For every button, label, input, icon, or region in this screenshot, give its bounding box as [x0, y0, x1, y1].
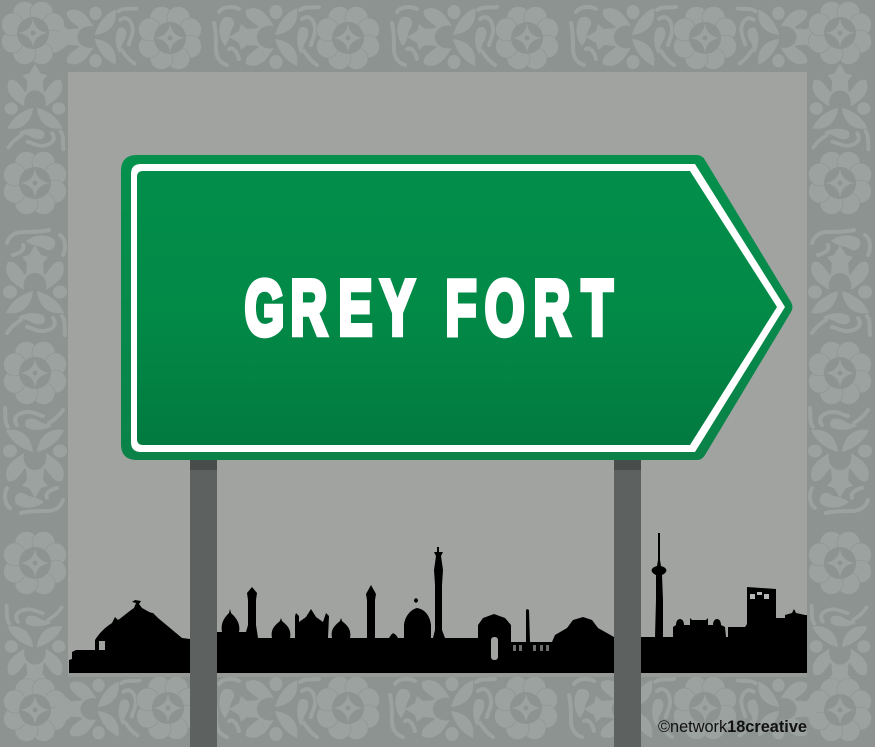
sign outer edge [121, 155, 792, 460]
copyright credit: ©network18creative [658, 718, 807, 736]
right border [808, 64, 872, 741]
sign white inset border [131, 164, 785, 452]
post: left [190, 460, 217, 747]
central grey panel [68, 72, 807, 673]
post: right [614, 460, 641, 747]
sign title: GREY FORT [245, 264, 613, 351]
left border [3, 64, 67, 741]
green road sign [121, 155, 792, 460]
bottom border [54, 676, 823, 741]
panel lower edge strip [68, 670, 807, 677]
top border [2, 2, 872, 70]
sign green face [137, 171, 777, 445]
city skyline silhouette [69, 533, 807, 673]
